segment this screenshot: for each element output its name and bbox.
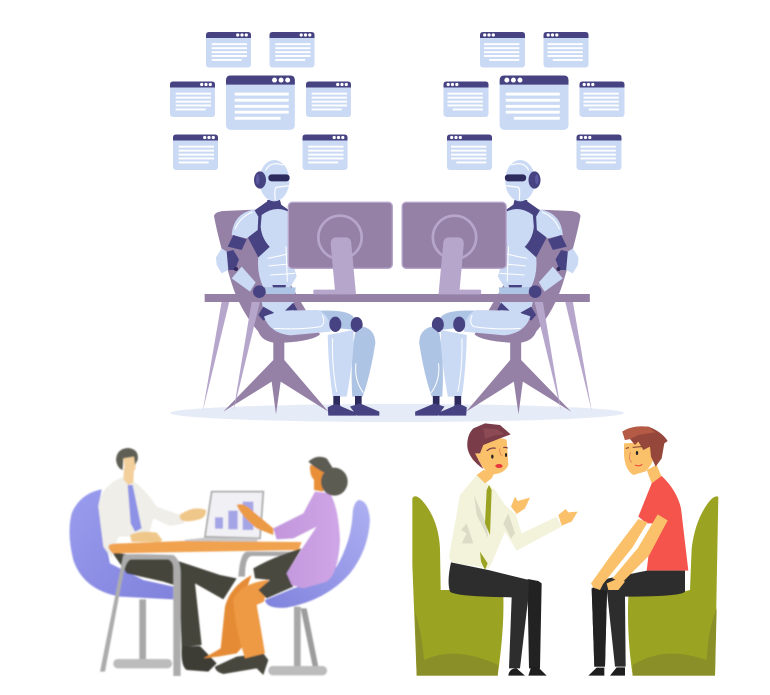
desk top: [205, 294, 399, 302]
monitor: [288, 202, 392, 294]
man in red shirt: [588, 426, 688, 676]
woman: [203, 457, 348, 675]
laptop: [184, 492, 263, 543]
woman's chair: [265, 500, 370, 675]
man in shirt and tie: [449, 423, 578, 676]
left armchair: [412, 496, 503, 676]
panel: left robot at desk: [170, 32, 399, 416]
man's chair: [70, 489, 173, 668]
near leg: [264, 310, 363, 416]
robot workstation: [203, 160, 399, 416]
far leg: [318, 310, 379, 416]
chair: [214, 210, 328, 414]
right armchair: [628, 496, 718, 676]
head: [254, 160, 290, 207]
windows: floating documents: [170, 32, 351, 170]
panel: flat-style conversation scene: [412, 423, 718, 676]
robot wrist: [253, 285, 266, 298]
torso: [248, 201, 297, 321]
robot body: [216, 160, 379, 416]
arm: [216, 209, 258, 292]
desk legs: [203, 302, 260, 412]
panel: right robot at desk (mirrored): [396, 32, 624, 416]
panel: 3D meeting scene: [70, 448, 370, 676]
floor shadow under robots: [170, 404, 624, 422]
table: [100, 541, 302, 676]
man: [98, 448, 237, 672]
